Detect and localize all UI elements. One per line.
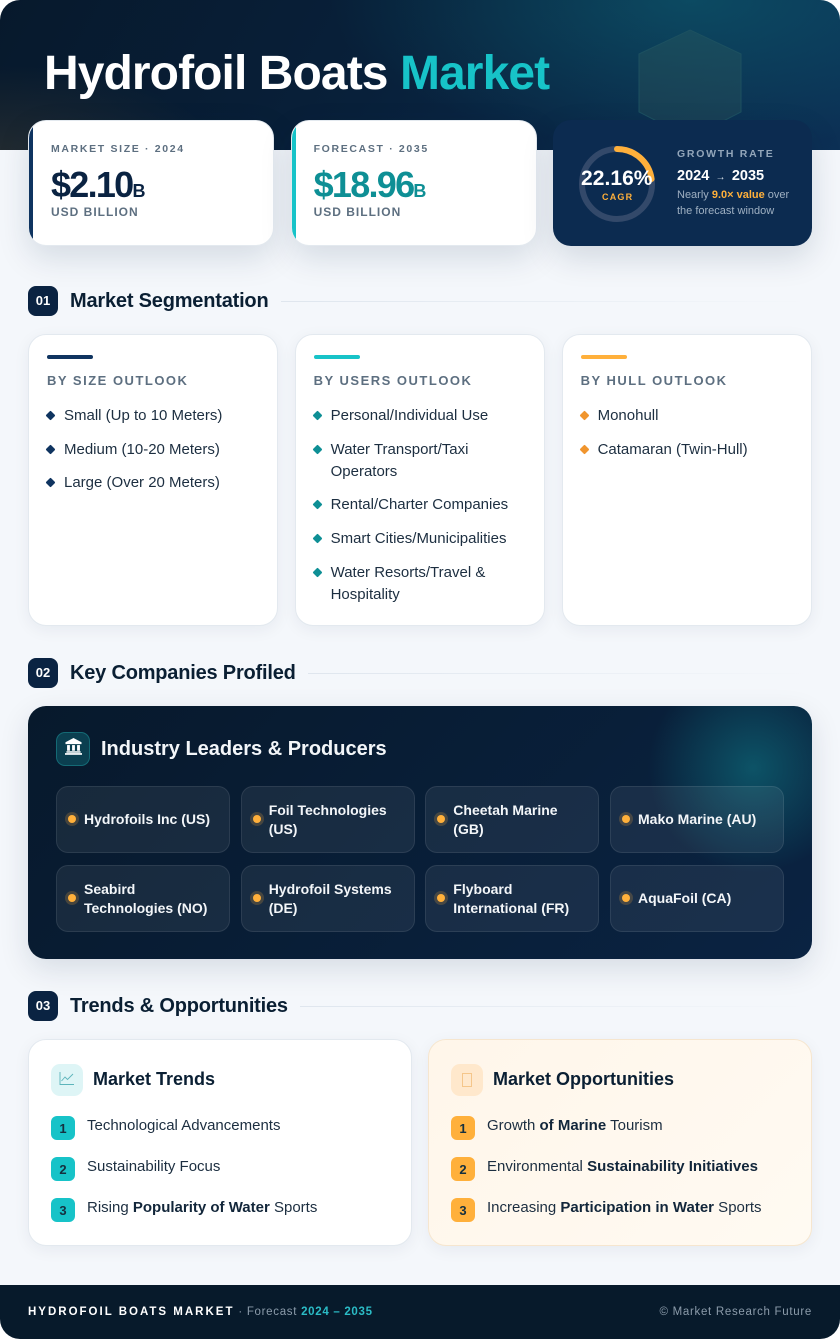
decorative hexagon: [638, 30, 742, 120]
panel: market trends: Rising Popularity of Water Sports: [87, 1199, 317, 1216]
company chip: Mako Marine (AU): [638, 811, 756, 827]
section heading 01: 01: [36, 293, 50, 308]
company chip: Hydrofoils Inc (US): [84, 811, 210, 827]
KPI card: market size: MARKET SIZE · 2024: [51, 143, 185, 155]
KPI card: market size: USD BILLION: [51, 205, 139, 219]
KPI card: growth rate: CAGR: [602, 192, 633, 202]
company chip: [56, 865, 230, 932]
text: Trends & Opportunities: [70, 995, 288, 1017]
company chip: [241, 865, 415, 932]
panel: market opportunities: [428, 1039, 812, 1246]
panel: size outlook: Large (Over 20 Meters): [64, 474, 220, 491]
panel: size outlook: BY SIZE OUTLOOK: [47, 373, 188, 388]
panel: industry leaders: [28, 706, 812, 959]
icon: chart: [51, 1064, 83, 1096]
panel: market opportunities: 1: [459, 1121, 467, 1136]
company chip: Technologies (NO): [84, 900, 207, 916]
company chip: [610, 786, 784, 853]
company chip: (GB): [453, 820, 484, 836]
company chip: International (FR): [453, 900, 569, 916]
KPI card: growth rate: 2024 2035: [677, 168, 764, 184]
footer: HYDROFOIL BOATS MARKET · Forecast 2024 – 2035: [28, 1306, 373, 1318]
panel: size outlook: Medium (10-20 Meters): [64, 441, 220, 458]
KPI card: forecast: USD BILLION: [314, 205, 401, 219]
company chip: [610, 865, 784, 932]
footer: © Market Research Future: [660, 1306, 812, 1318]
KPI card: growth rate: Nearly 9.0× value over: [677, 189, 789, 201]
company chip: (DE): [269, 900, 297, 916]
text: Key Companies Profiled: [70, 662, 296, 684]
panel: users outlook: Operators: [331, 462, 397, 480]
panel: users outlook: Rental/Charter Companies: [331, 496, 508, 513]
header band: [0, 0, 840, 150]
panel: users outlook: BY USERS OUTLOOK: [314, 373, 472, 388]
panel: size outlook: Small (Up to 10 Meters): [64, 407, 222, 424]
panel: market opportunities: Environmental Sustainability Initiatives: [487, 1158, 758, 1175]
panel: users outlook: Water Resorts/Travel &: [331, 564, 485, 581]
company chip: Cheetah Marine: [453, 802, 558, 818]
company chip: [425, 786, 599, 853]
KPI card: growth rate: GROWTH RATE: [677, 148, 774, 160]
panel: market trends: [28, 1039, 412, 1246]
section heading 02: [28, 658, 58, 688]
panel: market opportunities: Growth of Marine Tourism: [487, 1117, 663, 1134]
KPI card: market size: $2.10B: [51, 164, 146, 205]
company chip: [241, 786, 415, 853]
panel: hull outlook: BY HULL OUTLOOK: [581, 373, 728, 388]
company chip: Foil Technologies: [269, 802, 387, 818]
section heading 02: 02: [36, 665, 50, 680]
panel: hull outlook: [562, 334, 812, 626]
company chip: [56, 786, 230, 853]
panel: hull outlook: Catamaran (Twin-Hull): [598, 441, 748, 458]
company chip: Seabird: [84, 880, 135, 896]
panel: users outlook: Smart Cities/Municipalities: [331, 530, 506, 547]
KPI card: market size: [28, 120, 274, 246]
section heading 03: [28, 991, 58, 1021]
title: Hydrofoil Boats Market: [44, 47, 549, 100]
panel: market trends: Sustainability Focus: [87, 1158, 220, 1175]
panel title: Industry Leaders & Producers: [101, 738, 387, 760]
panel: market opportunities: 3: [459, 1203, 467, 1218]
panel: users outlook: Water Transport/Taxi: [331, 441, 468, 458]
panel: market trends: 2: [59, 1162, 67, 1177]
panel: market trends: 1: [59, 1121, 67, 1136]
icon: bank building: [56, 732, 90, 766]
panel: market trends: Technological Advancements: [87, 1117, 280, 1134]
company chip: (US): [269, 820, 297, 836]
text: Market Segmentation: [70, 290, 268, 312]
KPI card: forecast: FORECAST · 2035: [314, 143, 429, 155]
company chip: [425, 865, 599, 932]
KPI card: forecast: [291, 120, 537, 246]
panel: market trends: 3: [59, 1203, 67, 1218]
KPI card: growth rate: [553, 120, 812, 246]
panel: market opportunities: 2: [459, 1162, 467, 1177]
KPI card: forecast: $18.96B: [314, 164, 426, 205]
footer: [0, 1285, 840, 1339]
panel: users outlook: Hospitality: [331, 586, 400, 602]
section heading 01: [28, 286, 58, 316]
company chip: Hydrofoil Systems: [269, 880, 392, 896]
company chip: AquaFoil (CA): [638, 890, 731, 906]
panel: market trends: Market Trends: [93, 1069, 215, 1089]
panel: users outlook: Personal/Individual Use: [331, 407, 488, 424]
KPI card: growth rate: →: [716, 172, 726, 183]
panel: users outlook: [295, 334, 545, 626]
KPI card: growth rate: 22.16%: [581, 167, 653, 190]
section heading 03: 03: [36, 998, 50, 1013]
icon: placeholder box: [451, 1064, 483, 1096]
CAGR donut: [579, 146, 655, 222]
panel: hull outlook: Monohull: [598, 407, 658, 424]
company chip: Flyboard: [453, 880, 512, 896]
panel: market opportunities: Increasing Participation in Water Sports: [487, 1199, 762, 1216]
KPI card: growth rate: the forecast window: [677, 205, 774, 217]
panel: market opportunities: Market Opportunities: [493, 1069, 674, 1089]
panel: size outlook: [28, 334, 278, 626]
